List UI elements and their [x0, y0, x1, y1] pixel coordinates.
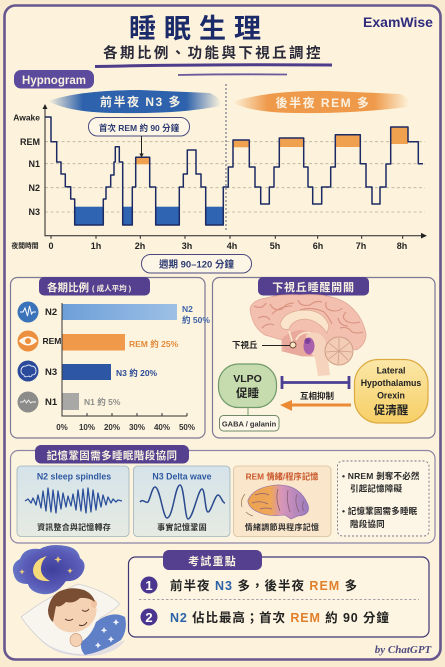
icon: REM eye [18, 330, 38, 352]
banner: first half N3 [48, 90, 221, 113]
key point 2: N2 佔比最高；首次 REM 約 90 分鐘 [170, 610, 390, 625]
time labels: 5h [270, 241, 280, 251]
bar chart: 40% [154, 423, 170, 432]
bar chart: 0% [56, 423, 68, 432]
panel: hypothalamic switch [212, 277, 435, 438]
bar chart: N1 約 5% [84, 397, 121, 407]
time labels: 4h [227, 241, 237, 251]
heading: memory [35, 445, 189, 464]
time labels: 2h [135, 241, 145, 251]
time labels: 6h [313, 241, 323, 251]
node: VLPO: 促睡 [236, 387, 259, 400]
hair [48, 588, 95, 622]
axes [45, 106, 425, 236]
heading: exam points [163, 550, 262, 570]
note: dashed key points [338, 461, 429, 536]
card: N2 spindles: N2 sleep spindles [37, 472, 111, 482]
label: GABA / galanin [220, 408, 279, 431]
face [65, 609, 89, 626]
pajama body [81, 614, 126, 655]
arrow: orexin to VLPO [280, 400, 351, 411]
key point 1: 1 [145, 578, 153, 593]
heading: Hypnogram [14, 70, 94, 88]
heading: proportions: 各期比例 ( 成人平均 ) [47, 281, 132, 294]
banner: second half REM [232, 91, 410, 113]
note: dashed key points: • 記憶鞏固需多睡眠 [342, 506, 418, 516]
stage labels: REM [42, 336, 61, 346]
time labels: 8h [397, 241, 407, 251]
hand [70, 634, 82, 646]
heading: memory: 記憶鞏固需多睡眠階段協同 [47, 449, 177, 462]
icon: N3 brain [18, 360, 38, 382]
bar chart: REM 約 25% [129, 339, 179, 349]
card: N3 delta: N3 Delta wave [152, 472, 212, 482]
bar chart: N3 約 20% [116, 368, 158, 378]
bar chart: 50% [179, 423, 195, 432]
stage labels [42, 307, 61, 408]
stage labels [13, 112, 40, 217]
callout: first REM: 首次 REM 約 90 分鐘 [99, 123, 180, 133]
card: N3 delta: 事實記憶鞏固 [157, 522, 207, 532]
note: dashed key points: • NREM 剝奪不必然 [342, 471, 420, 481]
night cloud [13, 545, 85, 594]
callout: first REM [88, 118, 190, 158]
hypnogram chart [11, 84, 427, 251]
node: VLPO [218, 364, 276, 408]
stage labels: N1 [45, 397, 58, 408]
time labels: 3h [182, 241, 192, 251]
subtitle: 各期比例、功能與下視丘調控 [103, 44, 323, 62]
head [45, 585, 103, 639]
heading: switch: 下視丘睡醒開關 [272, 280, 355, 294]
callout: cycle length: 週期 90–120 分鐘 [159, 258, 234, 270]
REM blocks [136, 127, 408, 164]
title: 睡眠生理 [129, 14, 269, 44]
signature: by ChatGPT [375, 644, 433, 656]
stage labels: Awake [13, 112, 40, 122]
illustration: sleeping child and moon [13, 545, 126, 656]
banner: second half REM: 後半夜 REM 多 [276, 95, 370, 110]
node: lateral hypothalamus orexin [354, 360, 428, 423]
icon: N2 wave [18, 302, 38, 322]
cerebellum [325, 337, 353, 365]
stage labels: N2 [45, 307, 57, 318]
bar chart: 約 50% [182, 315, 210, 325]
icon: brain cross-section [250, 295, 366, 376]
node: lateral hypothalamus orexin: Lateral [377, 366, 405, 376]
time labels: 7h [356, 241, 366, 251]
callout: cycle length [142, 254, 252, 273]
panel: exam key points [128, 550, 429, 637]
banner: first half N3: 前半夜 N3 多 [100, 94, 182, 109]
node: lateral hypothalamus orexin: 促清醒 [374, 403, 409, 417]
N3 blocks [75, 207, 223, 225]
stage labels: N2 [28, 183, 40, 193]
label: GABA / galanin: GABA / galanin [222, 420, 277, 428]
label: hypothalamus [232, 340, 290, 350]
time labels: 夜間時間 [11, 241, 39, 250]
node: VLPO: VLPO [233, 373, 262, 385]
ear [91, 600, 97, 608]
gyri [254, 300, 363, 333]
note: dashed key points: 階段協同 [350, 519, 385, 529]
time labels: 1h [91, 241, 101, 251]
panel: stage proportions [10, 277, 210, 438]
brand: ExamWise: ExamWise [363, 14, 433, 30]
time labels [11, 241, 407, 251]
shadow under pillow [40, 640, 125, 656]
heading: exam points: 考試重點 [188, 554, 237, 568]
level grid lines [45, 142, 425, 212]
icon: N1 wave [18, 392, 38, 412]
node: lateral hypothalamus orexin: Hypothalamus [361, 378, 421, 388]
card: REM memory: REM 情緒/程序記憶 [246, 472, 319, 482]
card: REM memory [234, 466, 331, 536]
bar chart: N2 [182, 304, 193, 314]
key point 1: 前半夜 N3 多，後半夜 REM 多 [170, 578, 358, 593]
heading: Hypnogram: Hypnogram [22, 75, 86, 87]
arrow: mutual inhibition [282, 376, 349, 389]
panel: memory consolidation [10, 445, 435, 543]
corpus callosum [280, 310, 329, 333]
pillow [21, 584, 120, 655]
thalamus highlight [304, 338, 314, 354]
stage labels: N3 [28, 207, 40, 217]
key point 2: 2 [145, 610, 153, 625]
bar chart: 20% [104, 423, 120, 432]
sleep stage line [45, 117, 423, 225]
heading: switch [258, 277, 369, 296]
cerebrum [250, 295, 366, 356]
card: N2 spindles [17, 466, 129, 536]
stage labels: REM [20, 137, 40, 147]
bar chart: 30% [129, 423, 145, 432]
stage labels: N1 [28, 159, 40, 169]
heading: proportions [39, 277, 150, 296]
card: N2 spindles: 資訊整合與記憶轉存 [37, 522, 111, 532]
label: mutual inhibition: 互相抑制 [300, 391, 334, 401]
note: dashed key points: 引起記憶障礙 [350, 484, 403, 494]
bar chart [56, 303, 210, 432]
node: lateral hypothalamus orexin: Orexin [377, 390, 405, 400]
card: N3 delta [134, 466, 230, 536]
stage labels: N3 [45, 367, 57, 378]
time labels: 0 [48, 241, 54, 251]
bar chart: 10% [79, 423, 95, 432]
card: REM memory: 情緒調節與程序記憶 [245, 522, 319, 532]
brainstem [306, 333, 330, 376]
label: hypothalamus: 下視丘 [232, 340, 258, 350]
diencephalon [282, 330, 322, 356]
hypothalamus point [290, 342, 296, 348]
